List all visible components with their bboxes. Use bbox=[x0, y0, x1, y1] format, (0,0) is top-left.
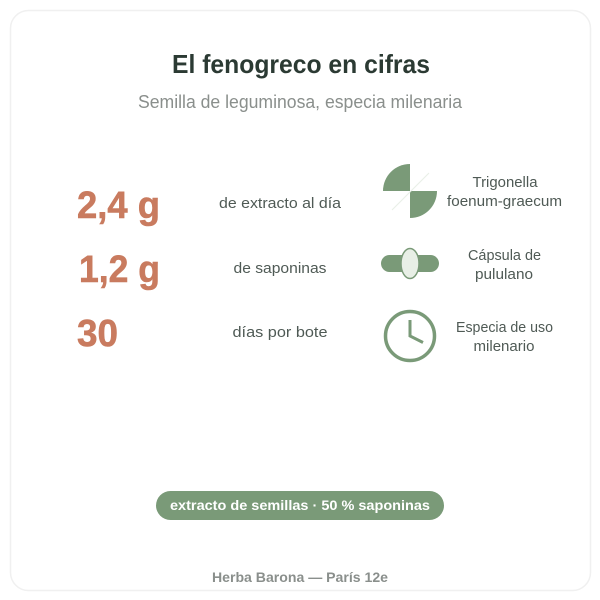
stat: 2,4 g: de extracto al día bbox=[219, 195, 342, 212]
pill badge: extracto de semillas · 50 % saponinas bbox=[170, 497, 430, 513]
subtitle: Semilla de leguminosa, especia milenaria bbox=[138, 92, 463, 112]
label: Especia de uso milenario bbox=[456, 320, 553, 355]
label: Cápsula de pululano bbox=[468, 248, 541, 283]
label: Especia de uso milenario: Especia de uso bbox=[456, 320, 553, 336]
stat: 2,4 g bbox=[77, 185, 342, 227]
stat: 30 bbox=[77, 313, 328, 355]
icon: capsule bbox=[381, 248, 439, 278]
stat: 1,2 g: 1,2 g bbox=[79, 249, 160, 291]
icon: clock bbox=[386, 312, 434, 360]
label: Especia de uso milenario: milenario bbox=[474, 339, 534, 355]
title: El fenogreco en cifras bbox=[172, 49, 430, 79]
footer: Herba Barona — París 12e bbox=[212, 569, 388, 585]
label: Cápsula de pululano: pululano bbox=[475, 267, 533, 283]
label: Trigonella foenum-graecum: foenum-graecum bbox=[447, 194, 562, 210]
stat: 1,2 g: de saponinas bbox=[234, 260, 326, 277]
stat: 30: días por bote bbox=[232, 324, 328, 341]
label: Trigonella foenum-graecum bbox=[447, 175, 562, 210]
pill badge bbox=[156, 491, 444, 520]
stat: 30: 30 bbox=[77, 313, 118, 355]
stat: 1,2 g bbox=[79, 249, 326, 291]
icon: leaf bbox=[383, 164, 437, 218]
stat: 2,4 g: 2,4 g bbox=[77, 185, 160, 227]
label: Trigonella foenum-graecum: Trigonella bbox=[472, 175, 538, 191]
label: Cápsula de pululano: Cápsula de bbox=[468, 248, 541, 264]
